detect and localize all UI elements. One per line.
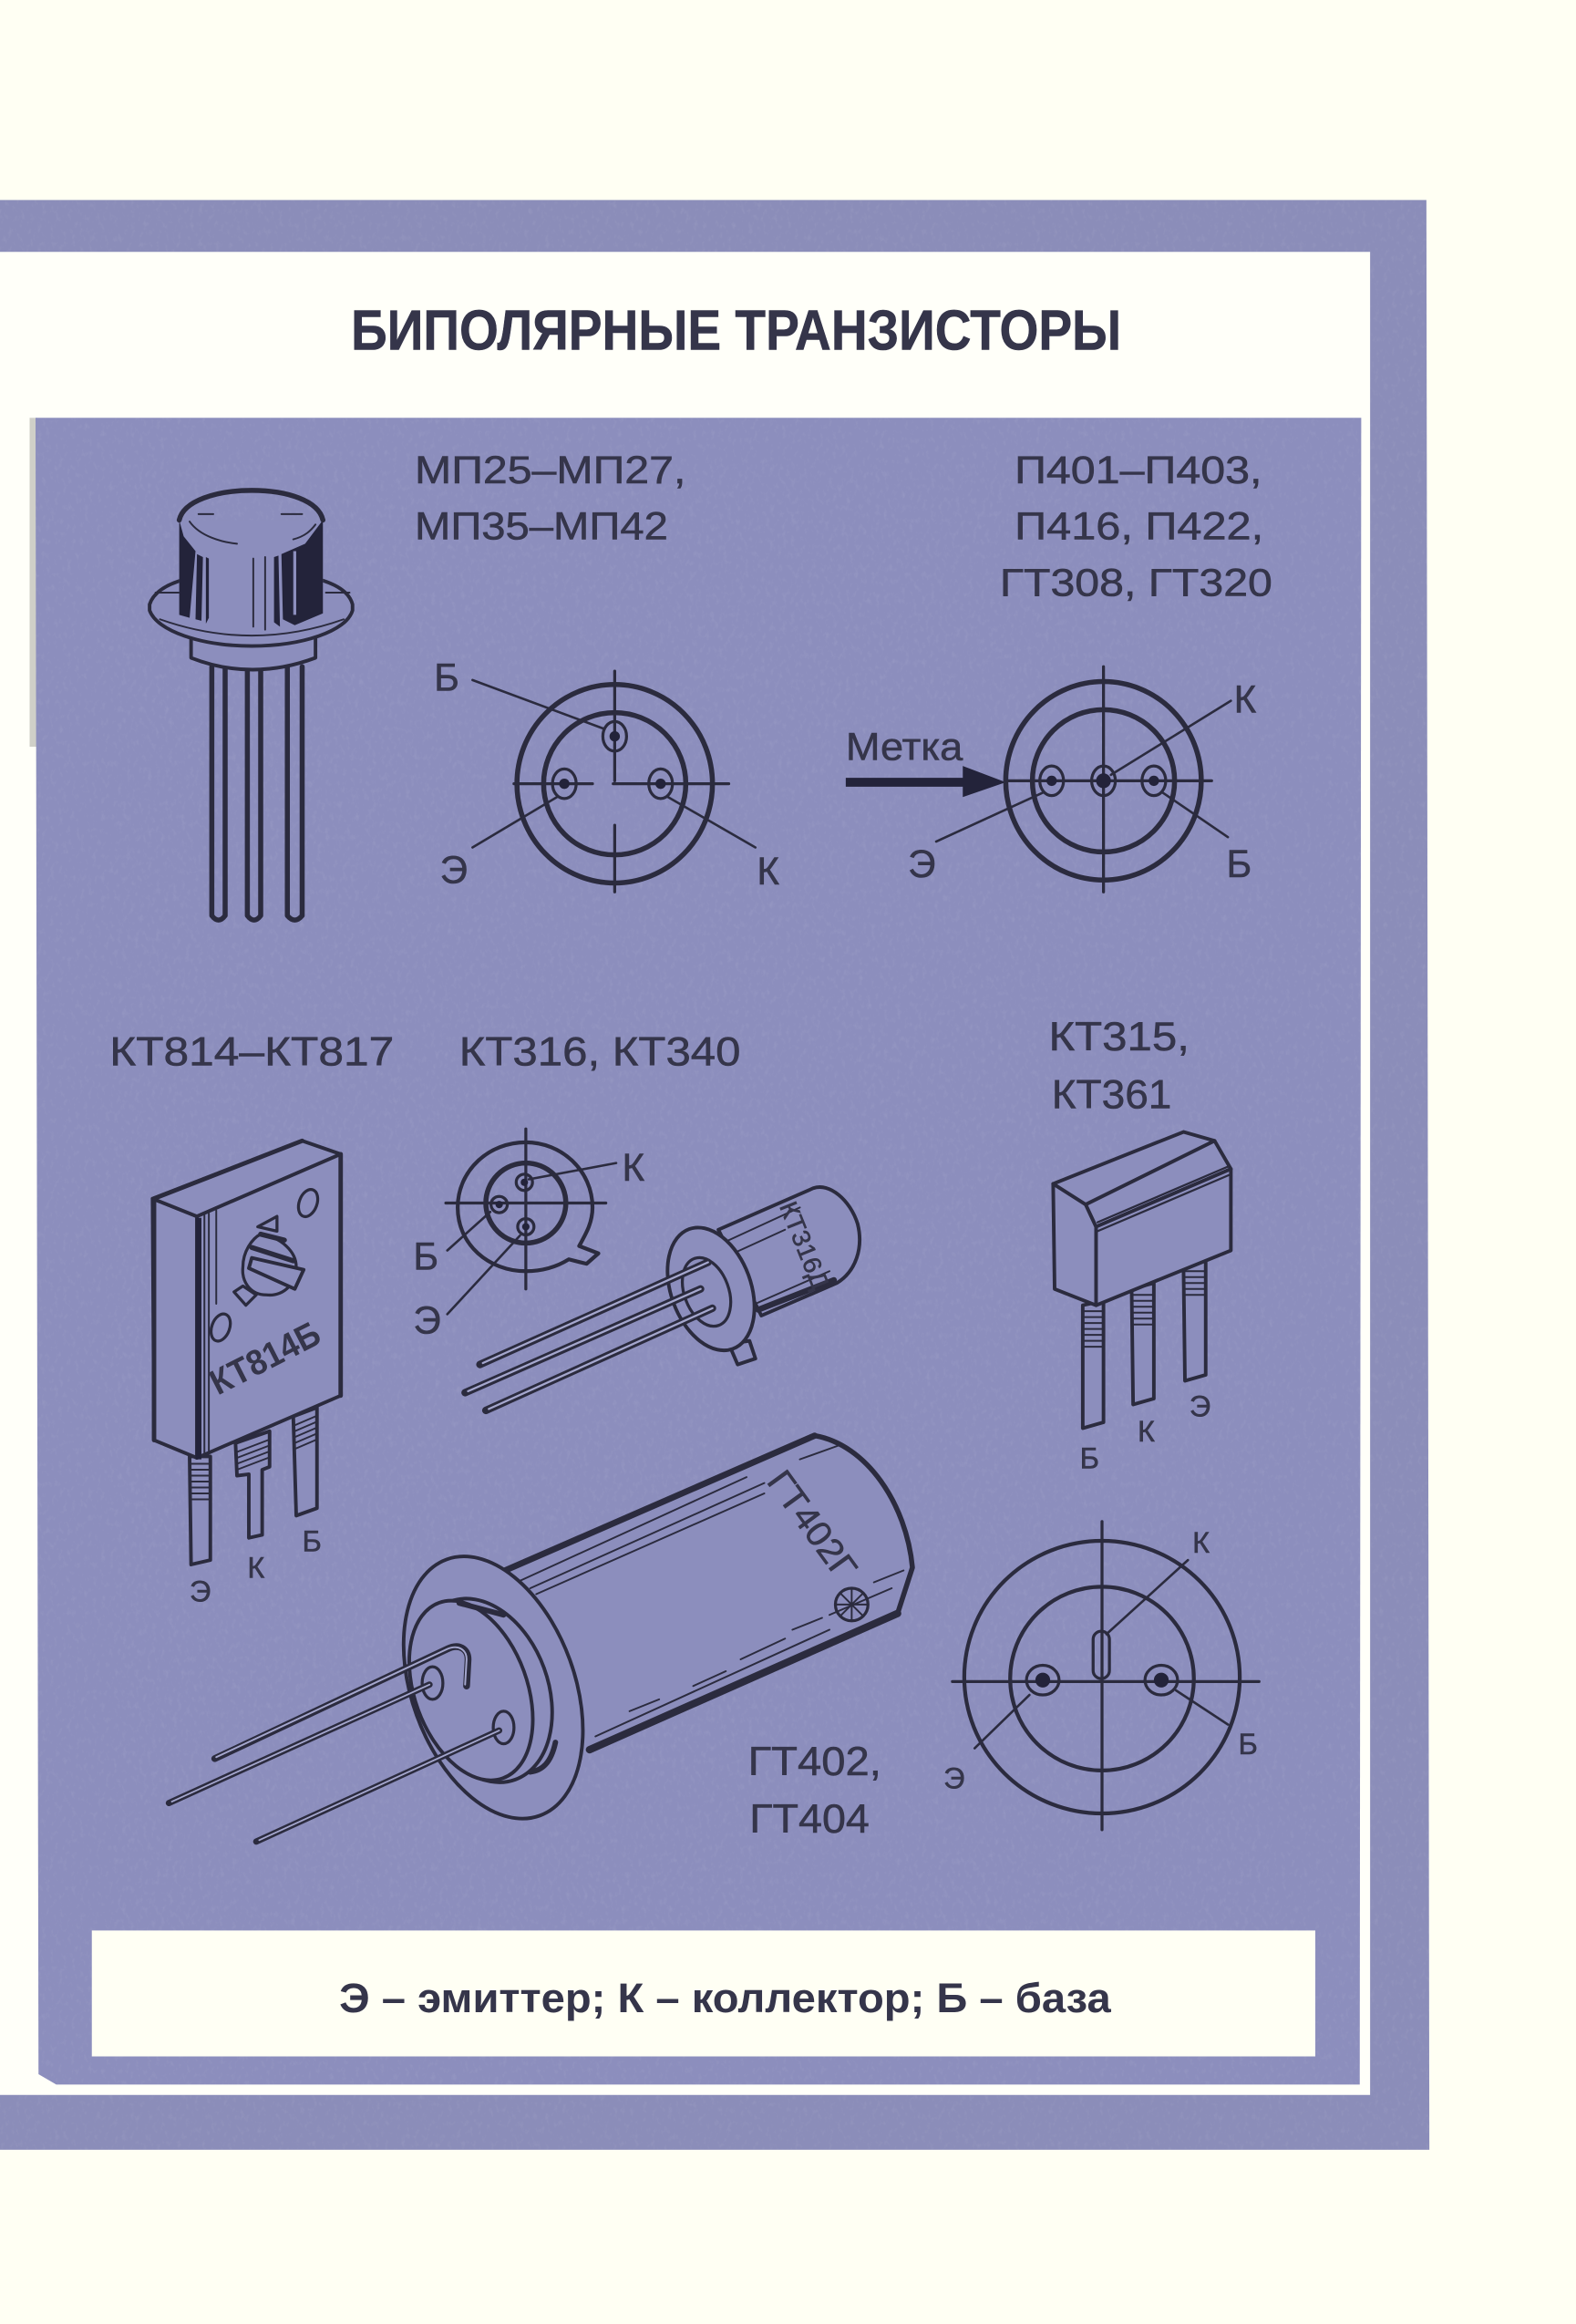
marker label: Метка — [846, 726, 963, 769]
pin letters: Б — [303, 1524, 322, 1557]
pin letters: Б — [434, 656, 459, 698]
pin letters — [908, 678, 1257, 885]
leads — [169, 1647, 500, 1842]
outer blue frame — [0, 200, 1429, 2150]
mounting holes — [208, 1187, 321, 1344]
flange with tab — [652, 1215, 770, 1365]
pin letters: Б — [1080, 1441, 1099, 1474]
leads — [465, 1263, 713, 1410]
front face — [1096, 1169, 1231, 1306]
labels: P401 series: ГТ308, ГТ320 — [1000, 561, 1272, 604]
device: KT814 plastic package — [152, 1141, 341, 1608]
body marking: ГТ402Г — [759, 1463, 864, 1587]
body marking: КТ316Д — [774, 1197, 835, 1294]
white panel — [0, 252, 1370, 2095]
labels: KT315: КТ315, — [1048, 1015, 1190, 1059]
labels: MP25 series: МП25–МП27, — [415, 449, 685, 491]
pin letters: Э — [413, 1299, 441, 1342]
labels: P401 series: П416, П422, — [1015, 505, 1263, 548]
labels: KT814 and KT316 — [109, 1029, 740, 1074]
leader lines — [448, 1163, 616, 1314]
pin letters: К — [1234, 678, 1257, 721]
pin letters: Э — [1190, 1390, 1210, 1423]
pin: collector — [1092, 766, 1116, 796]
chamfer — [1086, 1141, 1231, 1227]
pin letters: Б — [1227, 842, 1252, 885]
pin: collector — [516, 1174, 532, 1191]
pin letters — [413, 1146, 645, 1342]
labels: P401 series: П401–П403, — [1015, 449, 1262, 491]
flange — [149, 572, 353, 646]
leader lines — [974, 1560, 1228, 1749]
device: metal can transistor MP25 — [149, 491, 353, 920]
pinout diagram: KT316 — [413, 1129, 645, 1342]
pin: emitter — [518, 1219, 534, 1234]
legend text: Э – эмиттер; К – коллектор; Б – база — [339, 1975, 1111, 2021]
device: KT316 small can — [465, 1187, 860, 1410]
labels: KT315: КТ361 — [1052, 1073, 1171, 1118]
leads — [190, 1408, 317, 1565]
pin letters: К — [247, 1552, 264, 1585]
cap body — [180, 520, 323, 635]
side face — [1053, 1183, 1096, 1306]
pin collars — [422, 1667, 514, 1744]
front face — [197, 1154, 341, 1458]
labels: GT402: ГТ404 — [749, 1797, 870, 1842]
labels: KT315 — [1048, 1015, 1190, 1118]
pin letters: К — [623, 1146, 645, 1189]
pin letters: К — [757, 850, 779, 893]
pin letters: Б — [413, 1235, 438, 1278]
cap shading — [180, 520, 323, 630]
flange — [370, 1532, 616, 1844]
pin letters — [1080, 1390, 1210, 1474]
pin: emitter — [1040, 766, 1064, 796]
leads — [211, 666, 303, 920]
collar — [191, 635, 315, 670]
leader lines — [472, 680, 756, 848]
icon: manufacturer logo — [234, 1216, 304, 1306]
labels: MP25 series — [415, 449, 685, 548]
labels: P401 series — [1000, 449, 1272, 604]
pinout diagram: P401 — [908, 666, 1257, 892]
labels: GT402 — [748, 1740, 881, 1842]
package marking: КТ814Б — [203, 1314, 327, 1403]
leads — [1083, 1259, 1206, 1429]
labels: KT814 and KT316: КТ316, КТ340 — [459, 1029, 740, 1074]
grey plate edge — [29, 418, 37, 747]
leader lines — [936, 701, 1231, 842]
pin: collector — [649, 769, 673, 799]
pin: collector — [1093, 1631, 1109, 1678]
labels: KT814 and KT316: КТ814–КТ817 — [109, 1029, 394, 1074]
pin: base — [1145, 1666, 1178, 1695]
pin letters: К — [1192, 1526, 1210, 1559]
pin letters: Б — [1239, 1728, 1258, 1761]
icon: stamp — [835, 1588, 868, 1621]
cap top — [180, 491, 323, 543]
body — [718, 1187, 860, 1316]
pin: base — [603, 721, 626, 751]
pin letters: Э — [440, 849, 468, 892]
device: GT402 large can — [169, 1436, 912, 1844]
pin letters: Э — [190, 1575, 211, 1608]
paper grain — [268, 225, 1411, 1707]
side face — [152, 1199, 197, 1458]
arrow: marker — [846, 766, 1005, 797]
pin letters — [943, 1526, 1258, 1794]
pin letters — [434, 656, 779, 893]
pin letters: Э — [943, 1761, 964, 1794]
cylinder body — [505, 1436, 912, 1750]
pin letters: Э — [908, 842, 936, 885]
pin: emitter — [1026, 1666, 1059, 1695]
pin: base — [491, 1196, 508, 1213]
labels: GT402: ГТ402, — [748, 1740, 881, 1784]
pin: emitter — [552, 769, 576, 799]
labels: MP25 series: МП35–МП42 — [415, 505, 668, 548]
pin letters: К — [1138, 1415, 1155, 1448]
top face — [1053, 1132, 1214, 1204]
title: БИПОЛЯРНЫЕ ТРАНЗИСТОРЫ — [351, 300, 1121, 363]
pinout diagram: MP25 — [434, 656, 779, 893]
device: KT315 flat package — [1053, 1132, 1231, 1474]
pinout diagram: KT315 — [943, 1522, 1259, 1830]
inner blue panel — [36, 418, 1361, 2084]
legend panel — [92, 1930, 1315, 2057]
pin: base — [1142, 766, 1166, 796]
top face — [152, 1141, 341, 1216]
pin letters — [190, 1524, 322, 1608]
end cap — [389, 1579, 577, 1802]
